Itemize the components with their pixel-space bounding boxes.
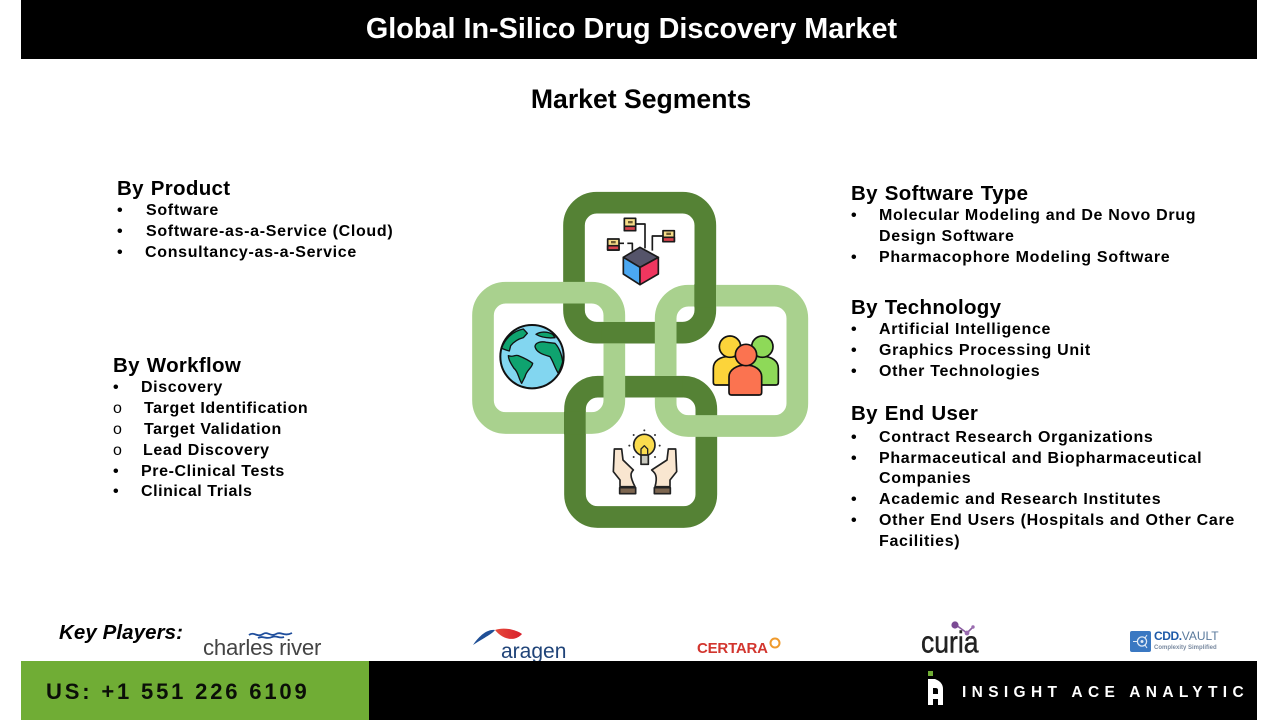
logo: cdd vault: Complexity Simplified: [1154, 645, 1217, 651]
title banner: [21, 0, 1242, 59]
label: key players: Key Players:: [59, 621, 183, 644]
panel: by end user: Other End Users (Hospitals and Other Care: [879, 512, 1235, 529]
panel: by technology: By Technology: [851, 296, 1001, 319]
logo: cdd vault: CDD.VAULT: [1154, 629, 1219, 643]
chart: interlocking rings with icons: [472, 192, 808, 528]
panel: by product: Software-as-a-Service (Cloud): [146, 223, 393, 240]
logo: insight ace analytic: INSIGHT ACE ANALYTIC: [962, 684, 1249, 701]
panel: by end user: •: [851, 491, 857, 508]
panel: by workflow: •: [113, 463, 119, 480]
panel: by software type: [851, 182, 1196, 266]
panel: by end user: Contract Research Organizations: [879, 429, 1153, 446]
icon: hands holding light bulb: [613, 429, 677, 494]
phone number panel: US: +1 551 226 6109: [46, 679, 310, 704]
panel: by software type: By Software Type: [851, 182, 1028, 205]
panel: by technology: [851, 296, 1091, 380]
panel: by workflow: Pre-Clinical Tests: [141, 463, 285, 480]
panel: by software type: Design Software: [879, 228, 1015, 245]
panel: by end user: •: [851, 450, 857, 467]
panel: by end user: •: [851, 512, 857, 529]
panel: by end user: Pharmaceutical and Biopharmaceutical: [879, 450, 1202, 467]
title banner: Global In-Silico Drug Discovery Market: [366, 13, 897, 45]
logo: charles river: charles river: [203, 635, 321, 660]
panel: by workflow: o: [113, 400, 123, 417]
panel: by workflow: [113, 354, 308, 500]
panel: by product: •: [117, 244, 123, 261]
panel: by workflow: •: [113, 483, 119, 500]
icon: data cube network: [608, 218, 674, 285]
logo: aragen: [471, 628, 566, 662]
panel: by end user: Facilities): [879, 533, 960, 550]
panel: by workflow: Clinical Trials: [141, 483, 252, 500]
panel: by workflow: Target Validation: [144, 421, 282, 438]
logo: cdd vault: [1130, 629, 1219, 652]
panel: by software type: Molecular Modeling and De Novo Drug: [879, 207, 1196, 224]
panel: by product: Software: [146, 202, 219, 219]
panel: by product: •: [117, 223, 123, 240]
panel: by technology: Other Technologies: [879, 363, 1040, 380]
panel: by end user: Academic and Research Institutes: [879, 491, 1161, 508]
footer bar: [21, 661, 1257, 720]
interlock overlaps: [564, 284, 716, 434]
panel: by software type: •: [851, 249, 857, 266]
phone number panel: [21, 661, 369, 720]
panel: by end user: By End User: [851, 402, 978, 425]
panel: by workflow: Lead Discovery: [143, 442, 270, 459]
panel: by software type: •: [851, 207, 857, 224]
panel: by workflow: By Workflow: [113, 354, 241, 377]
panel: by technology: •: [851, 363, 857, 380]
panel: by product: •: [117, 202, 123, 219]
logo: curia: curia: [921, 625, 978, 659]
icon: group of people: [713, 336, 778, 395]
panel: by end user: [851, 402, 1235, 550]
panel: by workflow: Target Identification: [144, 400, 308, 417]
logo: insight ace analytic: [928, 671, 1249, 705]
panel: by technology: Artificial Intelligence: [879, 321, 1051, 338]
panel: by technology: Graphics Processing Unit: [879, 342, 1091, 359]
panel: by product: By Product: [117, 177, 230, 200]
logo: aragen: aragen: [501, 640, 566, 663]
panel: by workflow: o: [113, 421, 123, 438]
panel: by technology: •: [851, 321, 857, 338]
panel: by end user: •: [851, 429, 857, 446]
panel: by technology: •: [851, 342, 857, 359]
panel: by end user: Companies: [879, 470, 971, 487]
panel: by workflow: •: [113, 379, 119, 396]
panel: by workflow: Discovery: [141, 379, 223, 396]
panel: by workflow: o: [113, 442, 123, 459]
icon: globe: [500, 325, 564, 388]
panel: by product: [117, 177, 393, 261]
panel: by software type: Pharmacophore Modeling Software: [879, 249, 1170, 266]
heading: market segments: Market Segments: [531, 84, 751, 114]
logo: certara: CERTARA: [697, 640, 768, 657]
panel: by product: Consultancy-as-a-Service: [145, 244, 357, 261]
